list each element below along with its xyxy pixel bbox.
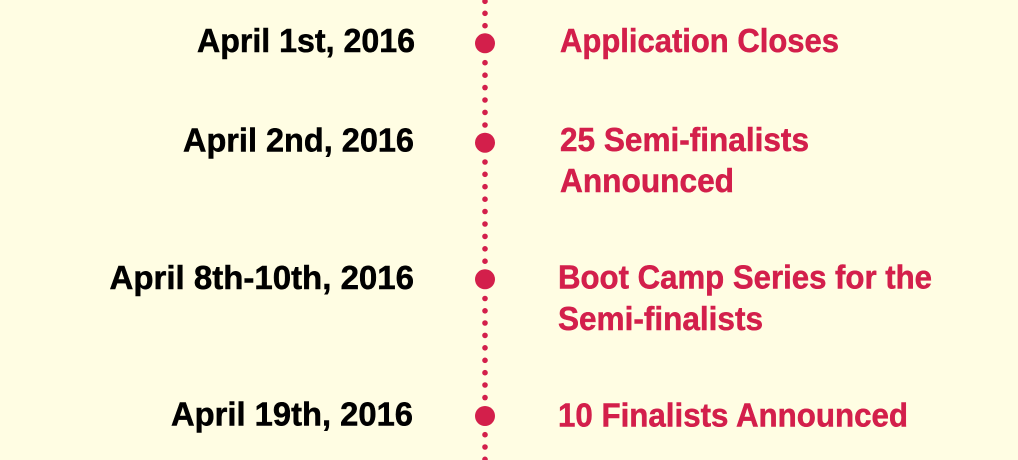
- date: April 19th: April 19th, 2016: [171, 396, 413, 433]
- milestone marker: April 8th-10th: [475, 269, 495, 289]
- event: application closes: Application Closes: [560, 22, 839, 59]
- milestone marker: April 19th: [475, 406, 495, 426]
- date: April 1st: April 1st, 2016: [197, 22, 415, 59]
- event: semi-finalists announced: 25 Semi-finalists: [560, 121, 809, 158]
- milestone marker: April 2nd: [475, 133, 495, 153]
- event: semi-finalists announced: Announced: [560, 162, 734, 199]
- date: April 2nd: April 2nd, 2016: [183, 121, 414, 158]
- event: boot camp series: Boot Camp Series for the: [558, 258, 932, 296]
- dotted vertical timeline: [482, 0, 488, 460]
- milestone marker: April 1st: [475, 33, 495, 53]
- event: finalists announced: 10 Finalists Announced: [558, 396, 908, 434]
- event: boot camp series: Semi-finalists: [558, 300, 763, 337]
- date: April 8th-10th: April 8th-10th, 2016: [110, 259, 414, 296]
- event: boot camp series: [558, 258, 932, 337]
- event: semi-finalists announced: [560, 121, 809, 199]
